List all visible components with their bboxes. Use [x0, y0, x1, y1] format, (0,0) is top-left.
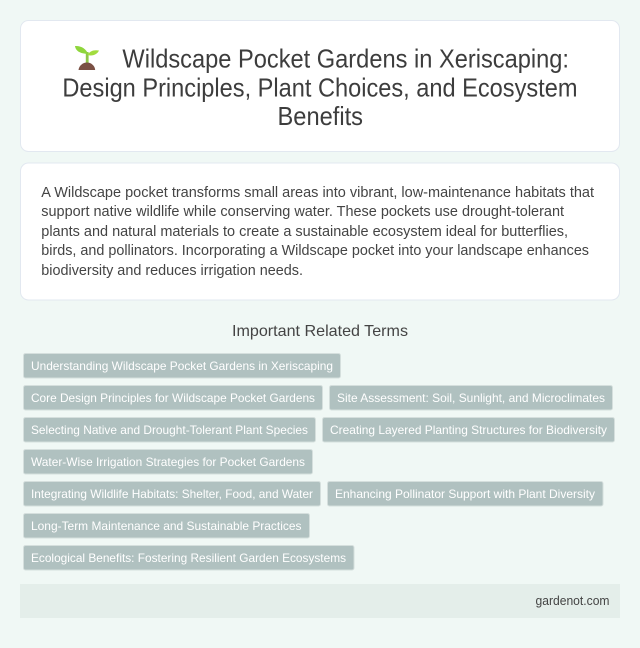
description text: A Wildscape pocket transforms small areas into vibrant, low-maintenance habitats that: [41, 185, 594, 201]
title text: [62, 46, 577, 131]
title text: Design Principles, Plant Choices, and Ecosystem: [62, 74, 577, 102]
chip: ecological benefits: [24, 546, 354, 570]
title text: Benefits: [278, 103, 363, 131]
icon: seedling: [75, 46, 99, 70]
heading: important related terms: Important Related Terms: [232, 323, 408, 340]
chip: maintenance: Long-Term Maintenance and Sustainable Practices: [31, 519, 302, 533]
title text: Wildscape Pocket Gardens in Xeriscaping:: [122, 46, 569, 74]
panel: title card: [20, 20, 620, 152]
footer: [20, 584, 620, 618]
chip: layered planting: Creating Layered Planting Structures for Biodiversity: [330, 423, 607, 437]
chip: understanding: [24, 354, 340, 378]
chip: ecological benefits: Ecological Benefits: Fostering Resilient Garden Ecosystems: [31, 551, 346, 565]
chip: wildlife habitats: Integrating Wildlife Habitats: Shelter, Food, and Water: [31, 487, 313, 501]
chip: maintenance: [24, 514, 310, 538]
chip: pollinator support: Enhancing Pollinator Support with Plant Diversity: [335, 487, 595, 501]
chip: core design: [24, 386, 322, 410]
chip: irrigation: [24, 450, 312, 474]
description text: biodiversity and reduces irrigation needs.: [41, 263, 303, 279]
description text: birds, and pollinators. Incorporating a Wildscape pocket into your landscape enhances: [41, 243, 589, 259]
chip: site assessment: Site Assessment: Soil, Sunlight, and Microclimates: [337, 391, 605, 405]
footer source text: gardenot.com: [536, 593, 610, 608]
chip: irrigation: Water-Wise Irrigation Strategies for Pocket Gardens: [31, 455, 305, 469]
description text: [41, 185, 594, 279]
chip: pollinator support: [328, 482, 603, 506]
chip: understanding: Understanding Wildscape Pocket Gardens in Xeriscaping: [31, 359, 333, 373]
chip: core design: Core Design Principles for Wildscape Pocket Gardens: [31, 391, 315, 405]
chip: site assessment: [330, 386, 612, 410]
chip: wildlife habitats: [24, 482, 320, 506]
chip: selecting species: [24, 418, 316, 442]
panel: description card: [20, 163, 620, 300]
description text: support native wildlife while conserving water. These pockets use drought-tolerant: [41, 204, 564, 220]
chip: layered planting: [322, 418, 614, 442]
panel: related term chips: [24, 354, 614, 570]
chip: selecting species: Selecting Native and Drought-Tolerant Plant Species: [31, 423, 308, 437]
description text: plants and natural materials to create a sustainable ecosystem ideal for butterflies,: [41, 224, 568, 240]
